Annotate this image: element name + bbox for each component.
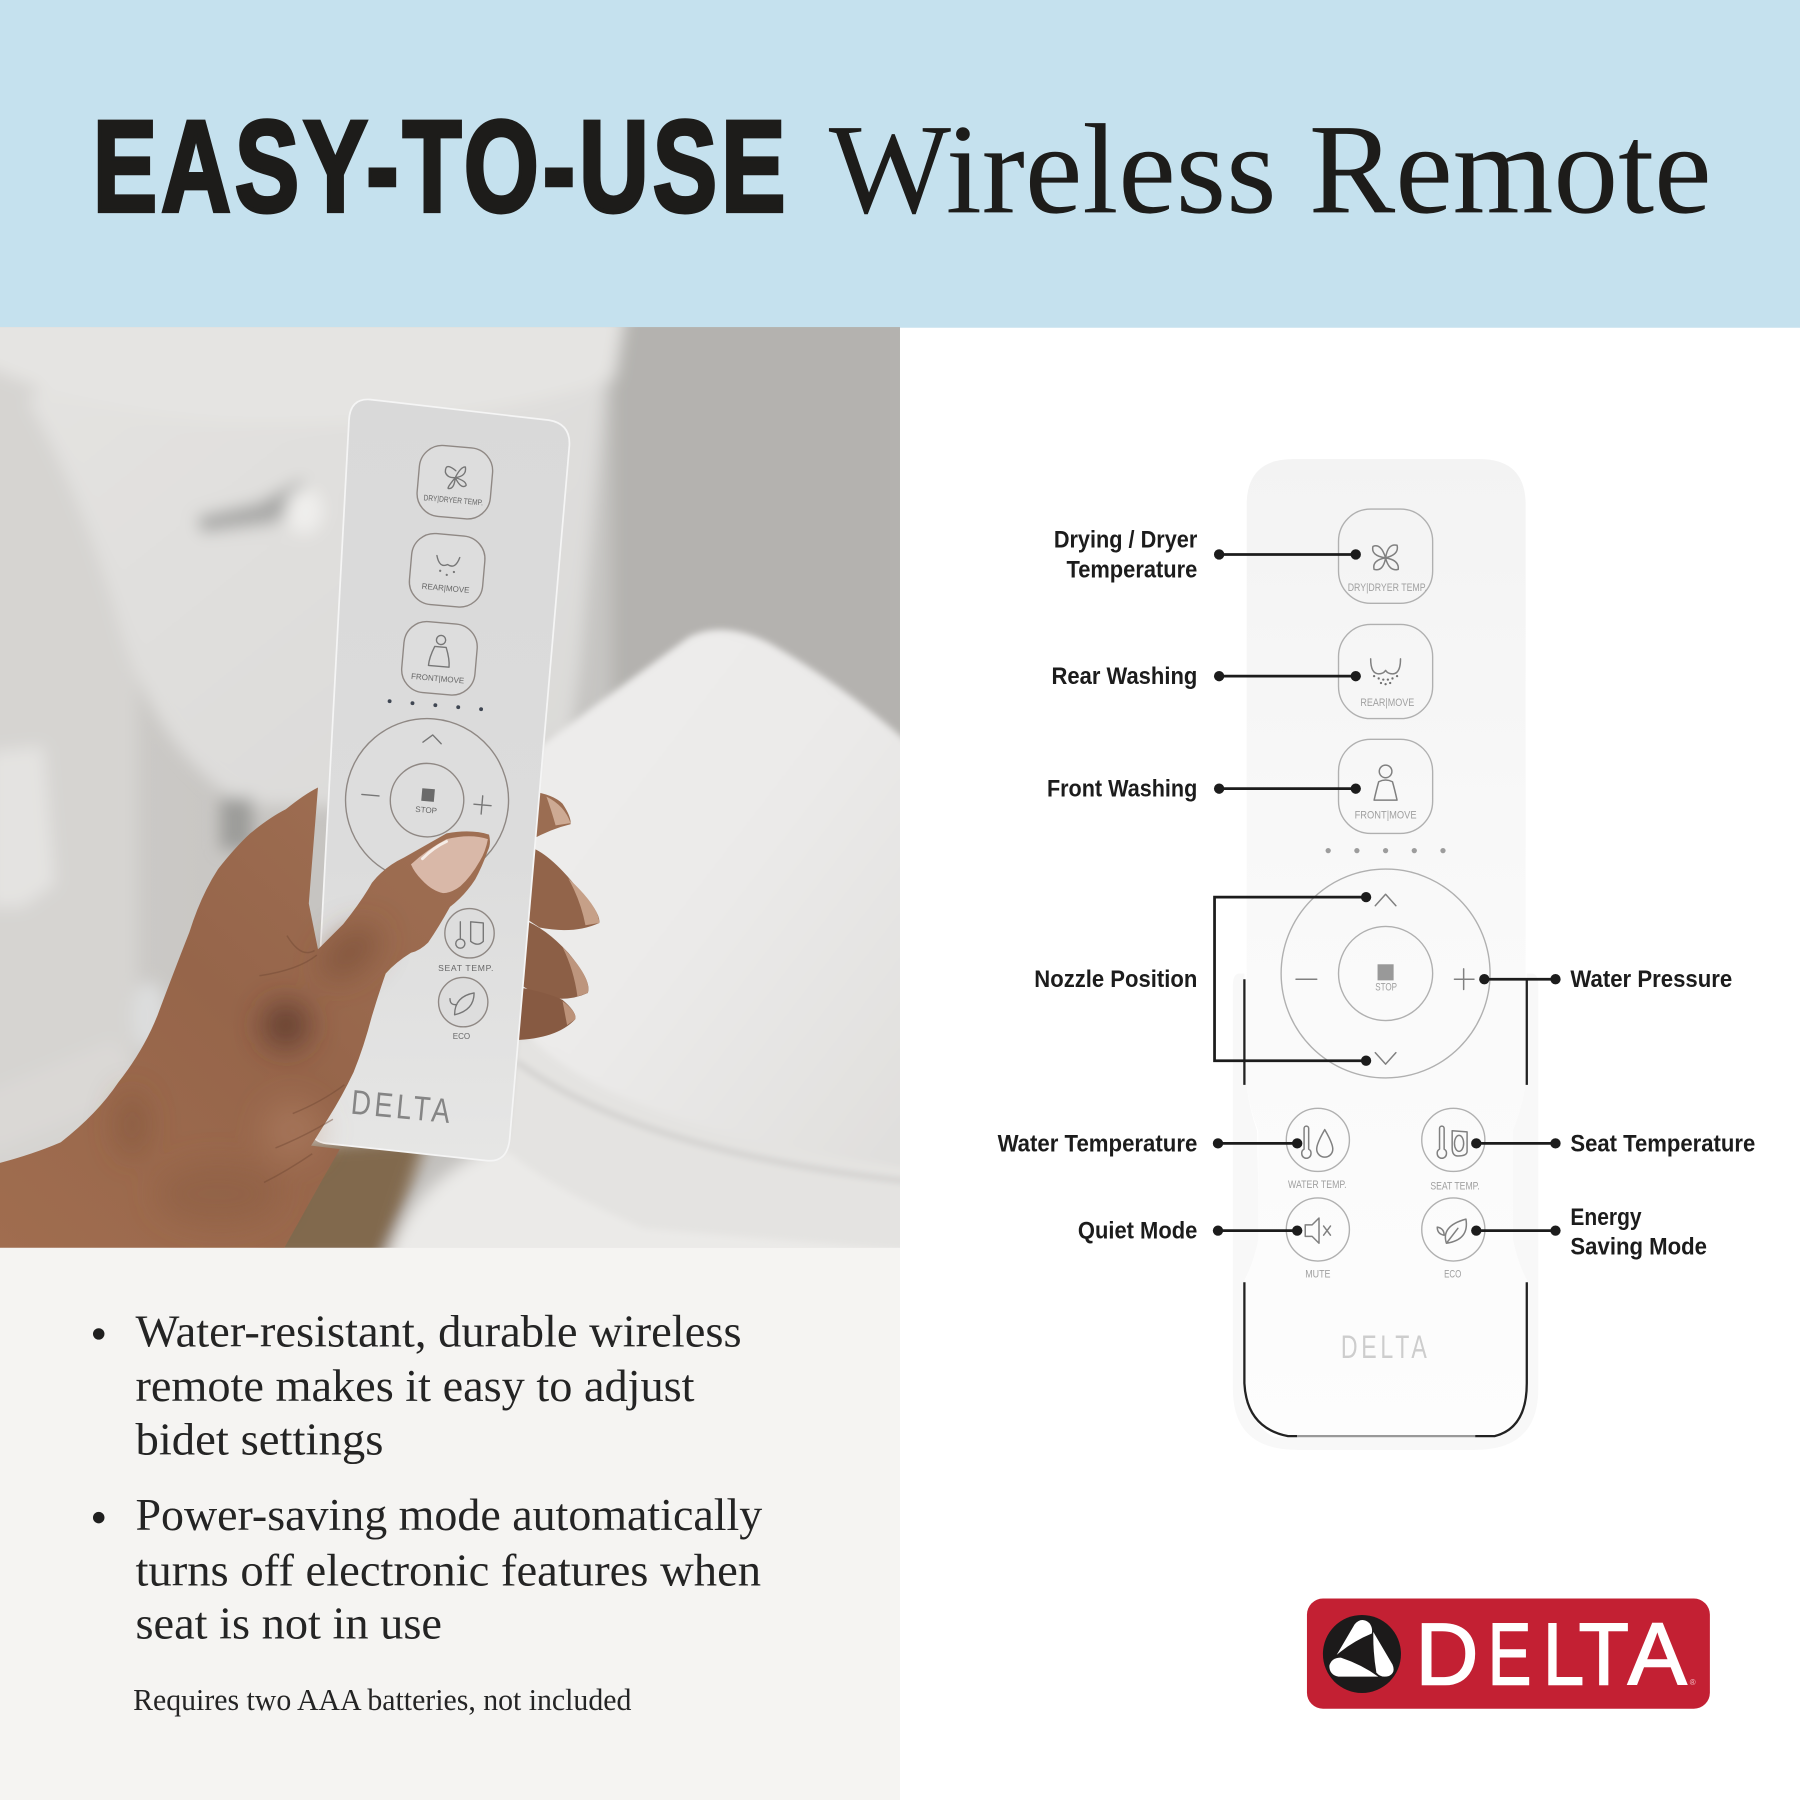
logo wordmark: D (1415, 1605, 1479, 1704)
bullet 1: bidet settings (135, 1413, 383, 1464)
callout: rear washing (1052, 663, 1361, 690)
blurred toilet tank and surroundings (0, 310, 918, 1274)
hand shading (102, 908, 378, 1152)
button: mute: MUTE (1305, 1269, 1330, 1281)
bullet 1: Water-resistant, durable wireless (135, 1306, 742, 1357)
remote black edge lines (1244, 979, 1527, 1436)
Delta logo (1307, 1599, 1710, 1709)
rear button: REAR|MOVE (421, 582, 470, 595)
callout: rear washing: Rear Washing (1052, 663, 1197, 690)
directional ring (1281, 869, 1490, 1078)
title: EASY-TO-USE (93, 95, 785, 239)
button: eco: ECO (1444, 1269, 1461, 1281)
front button: FRONT|MOVE (411, 672, 465, 686)
seat temp and eco buttons in photo (438, 909, 494, 1041)
callout: nozzle position (1034, 892, 1371, 1066)
indicator dots (1326, 848, 1446, 853)
rear button (407, 532, 487, 609)
button: water temp (1286, 1108, 1349, 1191)
logo wordmark: A (1628, 1605, 1687, 1704)
photo background wall (130, 683, 548, 1232)
remote body in photo (311, 399, 569, 1161)
callout: water pressure (1479, 966, 1732, 993)
seat temp and eco buttons in photo: ECO (453, 1032, 470, 1041)
bullet 1 (93, 1306, 742, 1464)
logo wordmark (1415, 1605, 1687, 1704)
blurred toilet lid (510, 626, 900, 1188)
button: seat temp: SEAT TEMP. (1430, 1180, 1480, 1192)
directional ring: STOP (1375, 982, 1397, 994)
hand creases (259, 936, 344, 1182)
remote buttons in photo (344, 444, 510, 870)
button: front: FRONT|MOVE (1355, 809, 1417, 821)
photo: hand holding remote in bathroom (0, 310, 918, 1274)
callout: drying (1054, 527, 1361, 583)
remote body (1244, 459, 1527, 1437)
fingers behind the remote (514, 791, 599, 1040)
button: dry (1339, 509, 1433, 603)
callout: seat temperature: Seat Temperature (1570, 1130, 1755, 1157)
bullet list (93, 1306, 762, 1649)
remote diagram (1233, 459, 1538, 1450)
registered mark: ® (1690, 1678, 1696, 1687)
button: mute (1286, 1198, 1349, 1281)
button: front (1339, 739, 1433, 833)
panel: bullet text background (0, 1248, 900, 1800)
DELTA wordmark on photo remote: DELTA (349, 1083, 452, 1131)
directional ring (344, 718, 510, 870)
callout: energy saving mode (1471, 1204, 1707, 1261)
button: dry: DRY|DRYER TEMP. (1348, 582, 1427, 594)
callout: drying: Temperature (1066, 556, 1197, 583)
DELTA wordmark on diagram remote: DELTA (1341, 1329, 1427, 1365)
seat temp and eco buttons in photo: SEAT TEMP. (438, 963, 494, 973)
callout: seat temperature (1471, 1130, 1755, 1157)
title: Wireless Remote (829, 97, 1712, 240)
callout: nozzle position: Nozzle Position (1034, 966, 1197, 993)
button: eco (1422, 1198, 1485, 1281)
callout: quiet mode: Quiet Mode (1078, 1218, 1197, 1245)
front button (400, 620, 479, 697)
thumbnail (411, 836, 488, 893)
callout: water temperature: Water Temperature (998, 1130, 1197, 1157)
dry button (415, 444, 495, 521)
bullet 2: seat is not in use (135, 1598, 442, 1649)
directional ring: STOP (415, 805, 437, 816)
callout: energy saving mode: Saving Mode (1570, 1234, 1707, 1261)
dry button: DRY|DRYER TEMP. (423, 493, 483, 507)
logo wordmark: L (1543, 1605, 1584, 1704)
bullet 1: remote makes it easy to adjust (135, 1360, 695, 1411)
logo wordmark: E (1488, 1605, 1531, 1704)
callout: front washing (1047, 776, 1361, 803)
callout: front washing: Front Washing (1047, 776, 1197, 803)
button: rear (1339, 624, 1433, 719)
footnote: Requires two AAA batteries, not included (133, 1682, 632, 1717)
remote outer cradle (1233, 973, 1538, 1450)
callouts left (998, 527, 1371, 1245)
callout: drying: Drying / Dryer (1054, 527, 1198, 554)
button: water temp: WATER TEMP. (1288, 1179, 1347, 1191)
callout: water pressure: Water Pressure (1570, 966, 1732, 993)
header band (0, 0, 1800, 328)
logo wordmark: T (1578, 1605, 1629, 1704)
bullet 2: turns off electronic features when (135, 1544, 761, 1595)
bullet 2 (93, 1489, 762, 1649)
button: rear: REAR|MOVE (1360, 697, 1415, 709)
logo mark (1323, 1615, 1401, 1693)
button: seat temp (1422, 1108, 1485, 1192)
callout: quiet mode (1078, 1218, 1302, 1245)
hand (0, 788, 490, 1251)
title (93, 95, 1712, 240)
callouts right (1471, 966, 1755, 1261)
callout: energy saving mode: Energy (1570, 1204, 1642, 1231)
bullet 2: Power-saving mode automatically (135, 1489, 762, 1540)
indicator dots (387, 699, 483, 711)
